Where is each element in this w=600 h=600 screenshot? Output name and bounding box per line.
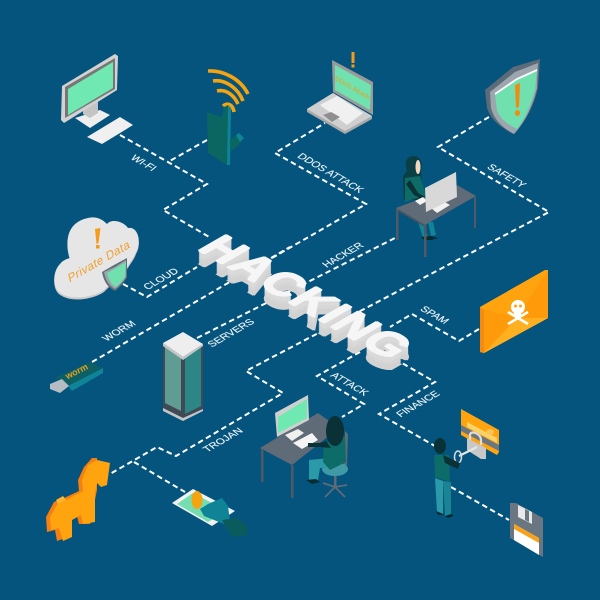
icon: laptop with DDoS attack [307, 52, 373, 134]
icon: worm usb stick [50, 361, 103, 393]
label: TROJAN: TROJAN [201, 427, 246, 454]
icon: cloud with private data: Private Data [67, 237, 131, 286]
icon: worm usb stick: worm [63, 361, 90, 382]
icon: laptop with DDoS attack: DDoS Attack [334, 75, 371, 102]
icon: desktop computer [61, 54, 133, 144]
label: CLOUD: CLOUD [141, 267, 182, 292]
icon: floppy disk [510, 503, 543, 557]
icon: cloud with private data [54, 217, 139, 299]
icon: spam envelope [480, 270, 548, 353]
label: ATTACK: ATTACK [327, 371, 370, 398]
icon: hacker at desk [396, 156, 476, 257]
label: WORM: WORM [100, 320, 139, 343]
icon: credit card with lock [461, 409, 499, 459]
label: SERVERS: SERVERS [206, 318, 258, 349]
label: DDOS ATTACK: DDOS ATTACK [294, 152, 366, 195]
icon: tablet with coins and hand [172, 489, 248, 537]
label: HACKER: HACKER [320, 241, 367, 270]
label: WI-FI: WI-FI [128, 154, 158, 173]
title: HACKING: HACKING [187, 228, 427, 366]
icon: wifi hand [207, 71, 248, 165]
icon: server rack [163, 332, 203, 421]
label: SAFETY: SAFETY [484, 163, 528, 190]
label: SPAM: SPAM [417, 305, 451, 326]
icon: person with key [434, 438, 477, 518]
icon: trojan horse [46, 458, 110, 541]
label: FINANCE: FINANCE [394, 390, 443, 419]
icon: person at computer desk [260, 395, 348, 498]
icon: safety shield [485, 59, 540, 134]
